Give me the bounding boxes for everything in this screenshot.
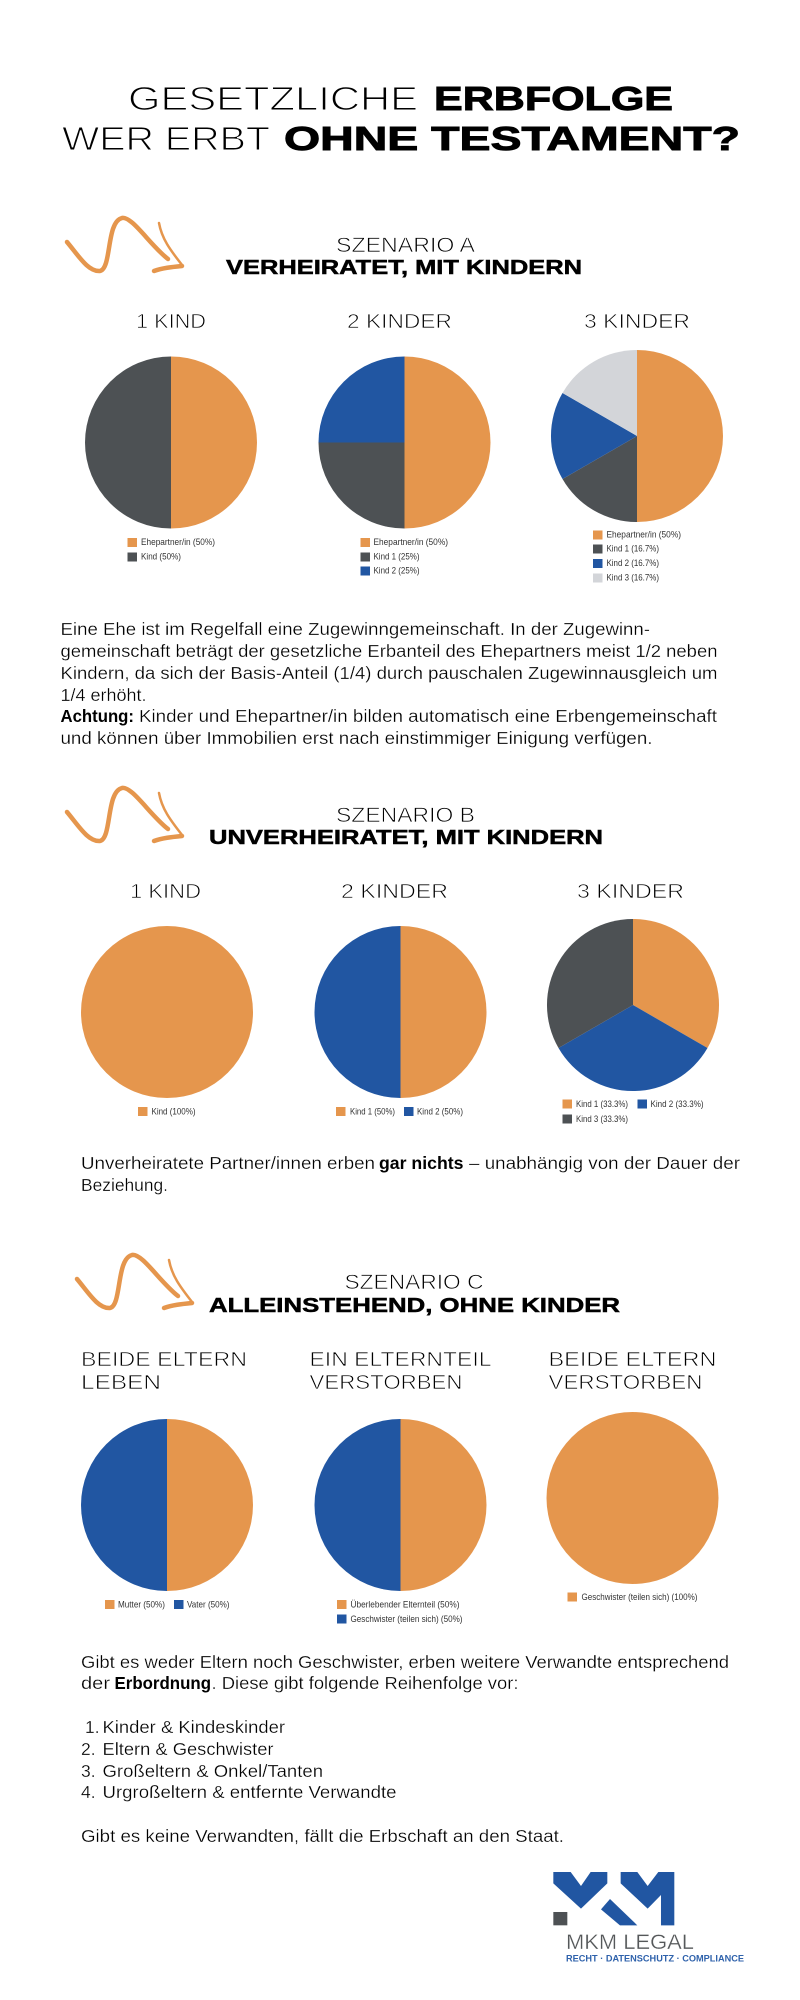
icon: hand-drawn arrow scenario A (67, 218, 182, 271)
text block: scenario A: Achtung: (60, 706, 134, 726)
legend (562, 1099, 704, 1125)
text block: scenario C: Gibt es weder Eltern noch Geschwister, erben weitere Verwandte entsprechend (81, 1652, 729, 1672)
ordered list: 3. (81, 1761, 96, 1781)
ordered list: Urgroßeltern & entfernte Verwandte (102, 1782, 396, 1802)
ordered list: 1. (85, 1717, 100, 1737)
chart heading: LEBEN (81, 1372, 161, 1394)
logo wordmark: MKM LEGAL (566, 1931, 694, 1954)
text block: scenario A (60, 619, 718, 748)
legend (337, 1600, 462, 1625)
panel: scenario A, 1 Kind (85, 311, 257, 562)
pie chart (85, 356, 257, 528)
chart heading: VERSTORBEN (310, 1372, 462, 1394)
legend: Geschwister (teilen sich) (100%) (582, 1592, 698, 1603)
pie chart (314, 1419, 486, 1591)
pie chart (551, 350, 723, 522)
panel: scenario B, 3 Kinder (547, 881, 719, 1125)
ordered list: Großeltern & Onkel/Tanten (102, 1761, 323, 1781)
legend: Kind 1 (50%) (350, 1106, 395, 1118)
panel: scenario B, 2 Kinder (314, 881, 486, 1118)
legend (593, 530, 681, 584)
panel: scenario A, 3 Kinder (551, 311, 723, 584)
text block: scenario A: Kinder und Ehepartner/in bilden automatisch eine Erbengemeinschaft (139, 706, 717, 726)
legend: Kind 1 (33.3%) (576, 1099, 628, 1110)
chart heading: 3 KINDER (577, 881, 684, 903)
legend: Überlebender Elternteil (50%) (350, 1600, 460, 1610)
pie chart (546, 1412, 718, 1584)
pie chart (318, 356, 490, 528)
logo: MKM Legal (553, 1872, 744, 1964)
chart heading: 1 KIND (136, 311, 206, 333)
panel: scenario B, 1 Kind (81, 881, 253, 1118)
legend: Vater (50%) (187, 1600, 230, 1610)
text block: scenario B: Beziehung. (81, 1175, 168, 1195)
heading: scenario A: SZENARIO A (336, 234, 475, 257)
legend: Ehepartner/in (50%) (606, 530, 681, 540)
text block: scenario C (81, 1652, 729, 1846)
chart heading: 1 KIND (130, 881, 201, 903)
legend: Geschwister (teilen sich) (50%) (350, 1614, 462, 1625)
text block: scenario C: . Diese gibt folgende Reihenfolge vor: (212, 1673, 518, 1693)
icon: hand-drawn arrow scenario B (67, 788, 182, 841)
title: GESETZLICHE (128, 81, 418, 118)
text block: scenario A: Eine Ehe ist im Regelfall eine Zugewinngemeinschaft. In der Zugewinn- (60, 619, 650, 639)
heading: scenario A: VERHEIRATET, MIT KINDERN (226, 257, 582, 279)
heading: scenario B: SZENARIO B (336, 804, 475, 827)
legend (128, 537, 215, 562)
chart heading: EIN ELTERNTEIL (310, 1349, 492, 1371)
legend: Kind 3 (16.7%) (606, 572, 659, 584)
icon: hand-drawn arrow scenario C (77, 1255, 192, 1308)
legend: Ehepartner/in (50%) (141, 537, 215, 548)
text block: scenario B: Unverheiratete Partner/innen erben (81, 1153, 375, 1173)
text block: scenario A: Kindern, da sich der Basis-Anteil (1/4) durch pauschalen Zugewinnausgleich um (60, 663, 718, 683)
title: ERBFOLGE (434, 81, 673, 118)
ordered list (81, 1717, 396, 1802)
legend: Kind 2 (16.7%) (606, 558, 659, 569)
text block: scenario A: und können über Immobilien erst nach einstimmiger Einigung verfügen. (60, 728, 652, 748)
pie chart (547, 919, 719, 1091)
heading: scenario C: SZENARIO C (344, 1271, 484, 1294)
text block: scenario C: Gibt es keine Verwandten, fällt die Erbschaft an den Staat. (81, 1826, 564, 1846)
legend: Kind 1 (25%) (374, 552, 420, 562)
chart heading: 2 KINDER (341, 881, 448, 903)
pie chart (81, 1419, 253, 1591)
legend (360, 537, 448, 576)
chart heading (310, 1349, 492, 1394)
chart heading: BEIDE ELTERN (81, 1349, 247, 1371)
title: OHNE TESTAMENT? (284, 121, 740, 158)
heading: scenario B: UNVERHEIRATET, MIT KINDERN (209, 827, 603, 849)
panel: scenario C, beide Eltern verstorben (546, 1349, 718, 1603)
logo tagline: RECHT · DATENSCHUTZ · COMPLIANCE (566, 1954, 744, 1964)
ordered list: 2. (81, 1739, 96, 1759)
chart heading: 2 KINDER (347, 311, 452, 333)
pie chart (81, 926, 253, 1098)
chart heading (81, 1349, 247, 1394)
legend: Mutter (50%) (118, 1600, 165, 1610)
legend: Kind 1 (16.7%) (606, 544, 659, 554)
chart heading: VERSTORBEN (548, 1372, 702, 1394)
legend: Ehepartner/in (50%) (374, 537, 448, 548)
legend: Kind (100%) (152, 1106, 196, 1118)
text block: scenario C: Erbordnung (114, 1673, 211, 1693)
legend: Kind 3 (33.3%) (576, 1114, 628, 1125)
ordered list: Kinder & Kindeskinder (102, 1717, 285, 1737)
heading: scenario C (209, 1271, 621, 1317)
title (62, 81, 740, 158)
panel: scenario A, 2 Kinder (318, 311, 490, 576)
logo mark (553, 1872, 674, 1925)
panel: scenario C, ein Elternteil verstorben (310, 1349, 492, 1625)
text block: scenario A: 1/4 erhöht. (60, 685, 146, 705)
text block: scenario B: – unabhängig von der Dauer der (469, 1153, 740, 1173)
ordered list: 4. (81, 1782, 96, 1802)
title: WER ERBT (62, 121, 270, 158)
pie chart (314, 926, 486, 1098)
heading: scenario A (226, 234, 582, 279)
legend: Kind 2 (50%) (417, 1106, 463, 1118)
text block: scenario B (81, 1153, 740, 1195)
chart heading: 3 KINDER (584, 311, 690, 333)
ordered list: Eltern & Geschwister (102, 1739, 274, 1759)
text block: scenario B: gar nichts (379, 1153, 464, 1173)
legend: Kind 2 (33.3%) (650, 1099, 704, 1110)
chart heading (548, 1349, 716, 1394)
legend: Kind (50%) (141, 552, 181, 562)
legend (138, 1106, 196, 1118)
heading: scenario C: ALLEINSTEHEND, OHNE KINDER (209, 1295, 621, 1317)
legend: Kind 2 (25%) (374, 566, 420, 576)
text block: scenario C: der (81, 1673, 110, 1693)
panel: scenario C, beide Eltern leben (81, 1349, 253, 1610)
legend (105, 1600, 230, 1610)
text block: scenario A: gemeinschaft beträgt der gesetzliche Erbanteil des Ehepartners meist 1/2 neben (60, 641, 718, 661)
legend (336, 1106, 463, 1118)
chart heading: BEIDE ELTERN (548, 1349, 716, 1371)
heading: scenario B (209, 804, 603, 849)
